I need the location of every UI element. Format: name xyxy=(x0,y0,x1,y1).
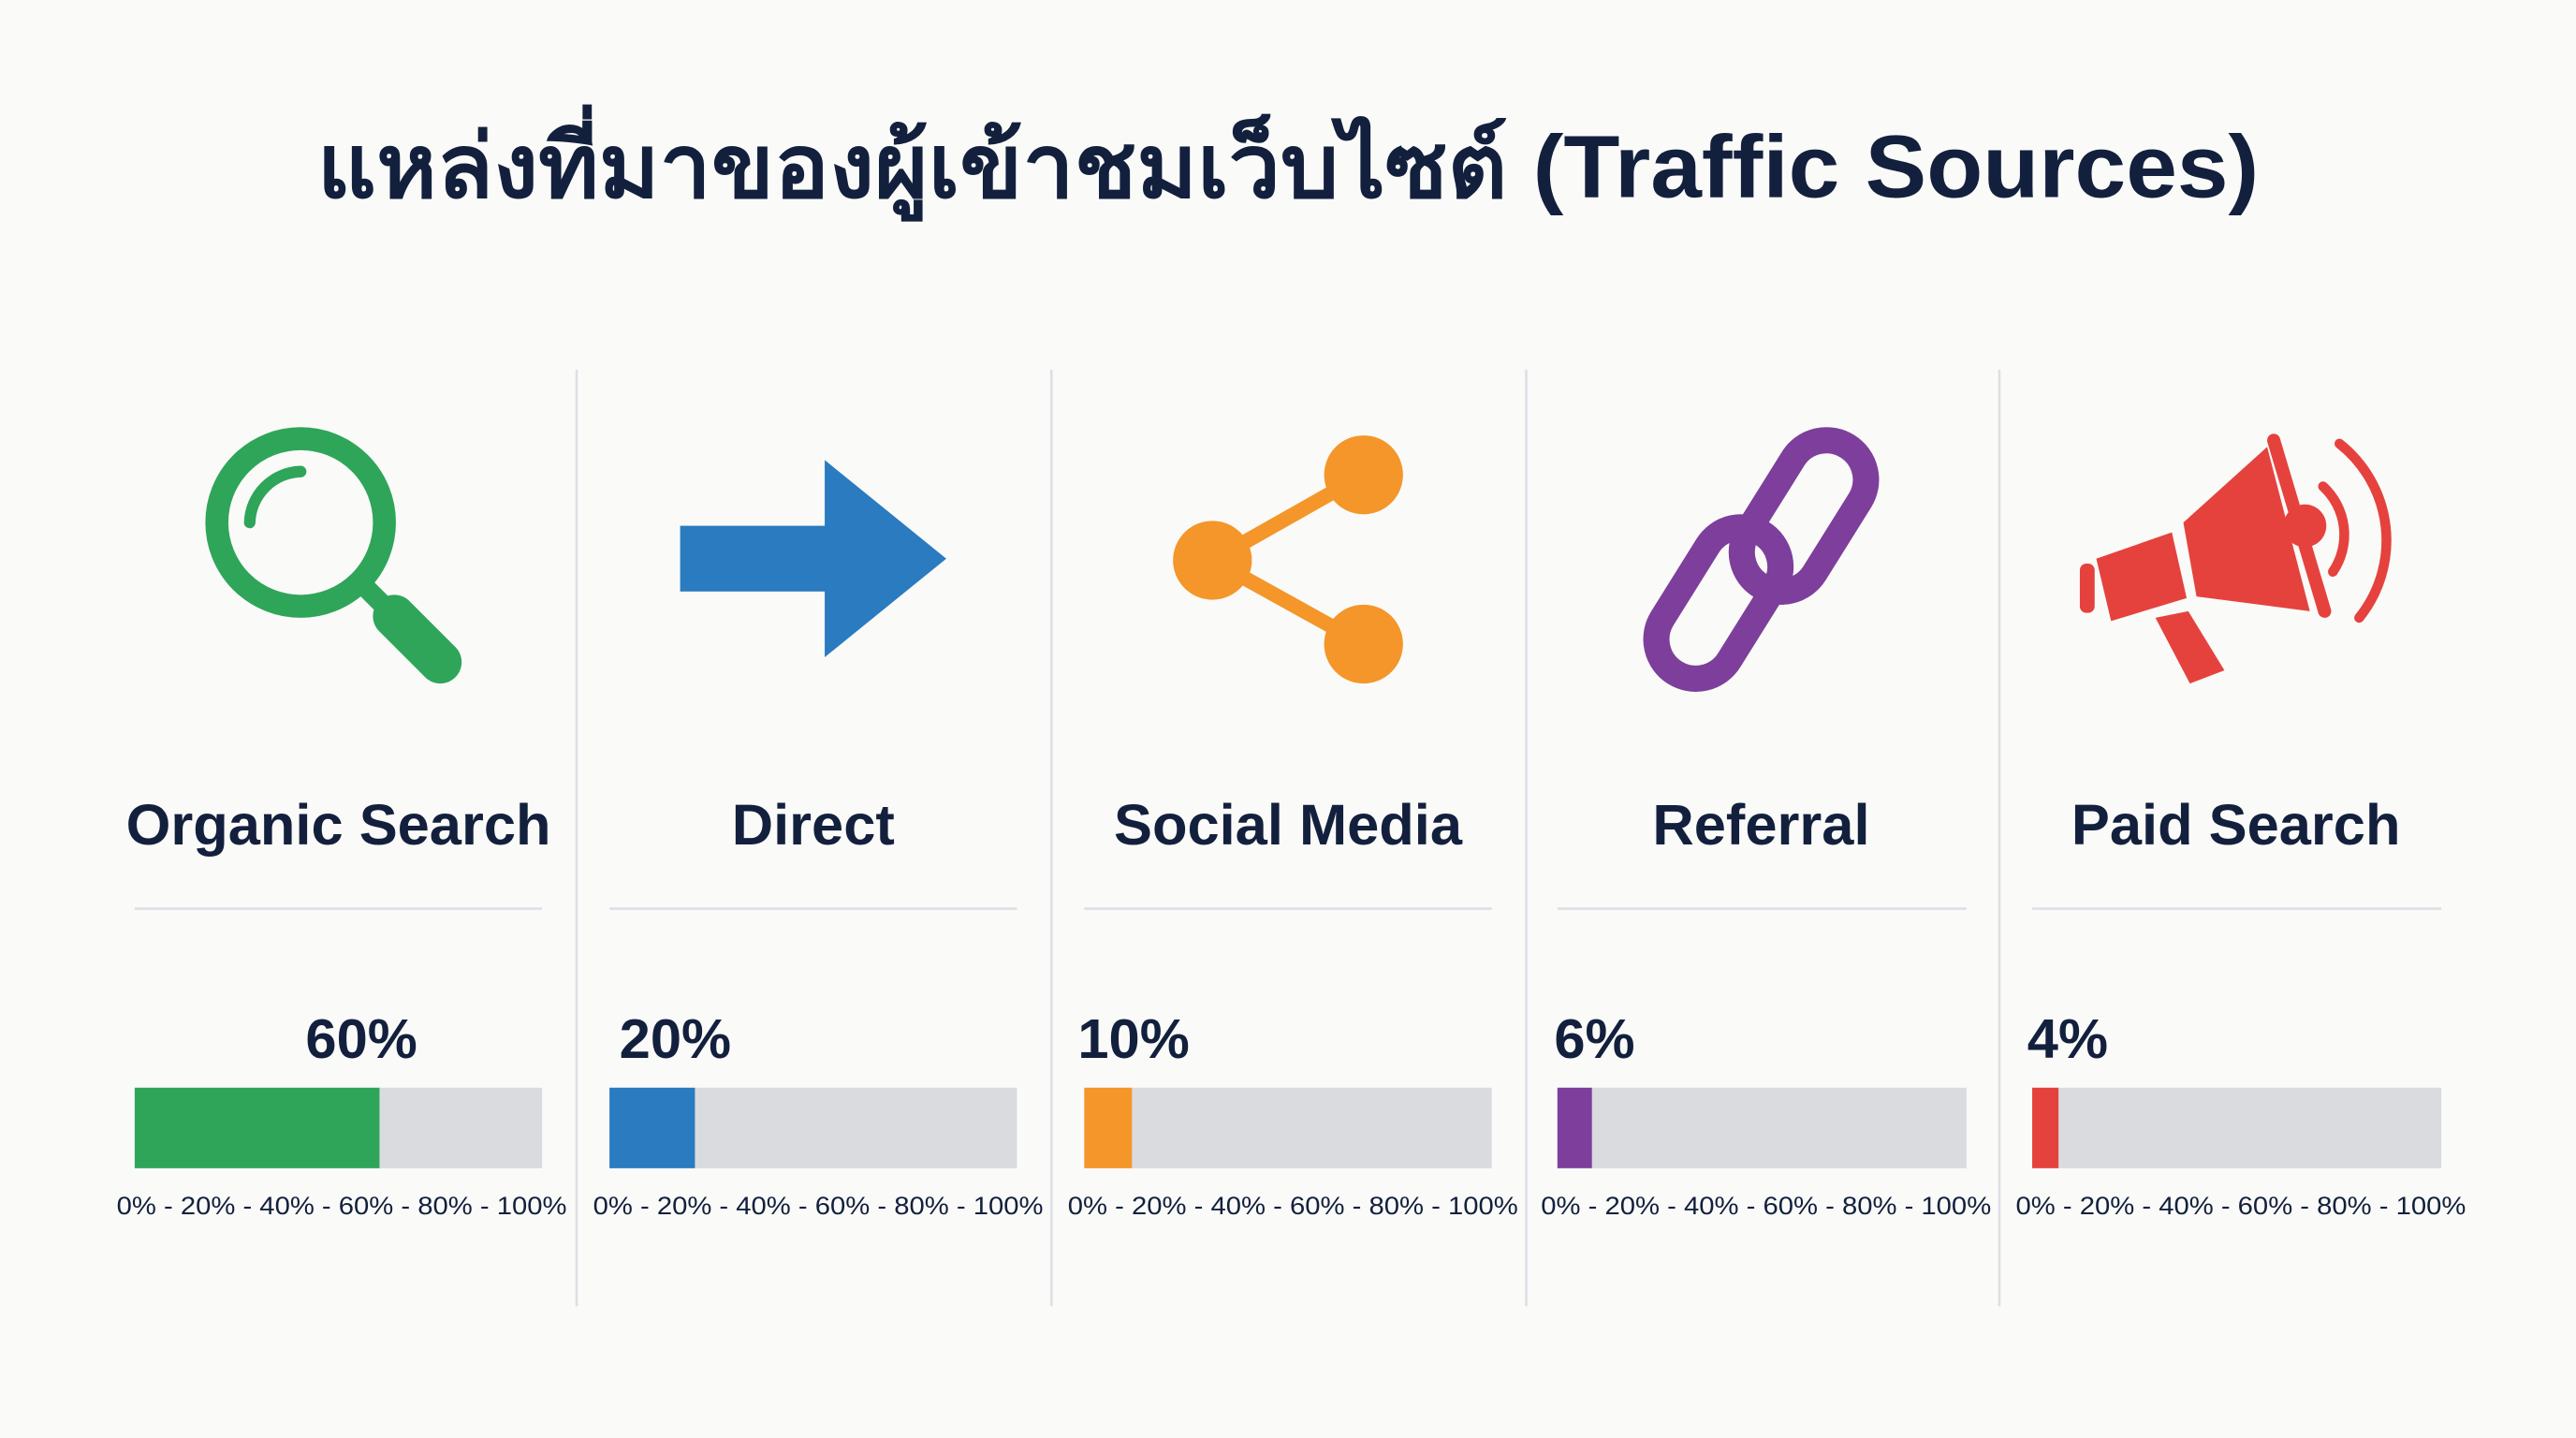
panel: referral xyxy=(1541,425,1991,1220)
axis labels: 0% - 20% - 40% - 60% - 80% - 100% xyxy=(593,1191,1043,1220)
title: แหล่งที่มาของผู้เข้าชมเว็บไซต์ (Traffic Sources) xyxy=(317,105,2259,223)
panel: social media xyxy=(1068,435,1518,1220)
percent: 10%: 10% xyxy=(1077,1007,1190,1070)
label: referral: Referral xyxy=(1652,793,1870,858)
percent: 20%: 20% xyxy=(620,1007,731,1070)
label: social media: Social Media xyxy=(1114,793,1463,858)
percent: 4%: 4% xyxy=(2027,1007,2108,1070)
panel: direct xyxy=(593,460,1043,1220)
panel: organic search xyxy=(117,439,567,1220)
icon: arrow xyxy=(681,460,946,657)
bar: 10% xyxy=(1084,1088,1492,1168)
label: paid search: Paid Search xyxy=(2071,793,2400,858)
panel: paid search xyxy=(2016,440,2466,1220)
percent: 60%: 60% xyxy=(305,1007,417,1070)
icon: megaphone xyxy=(2080,440,2386,683)
axis labels: 0% - 20% - 40% - 60% - 80% - 100% xyxy=(1541,1191,1991,1220)
icon: share xyxy=(1173,435,1403,683)
bar: 20% xyxy=(609,1088,1017,1168)
bar: 60% xyxy=(135,1088,542,1168)
label: direct: Direct xyxy=(732,793,895,858)
axis labels: 0% - 20% - 40% - 60% - 80% - 100% xyxy=(117,1191,567,1220)
bar: 6% xyxy=(1558,1088,1967,1168)
percent: 6%: 6% xyxy=(1554,1007,1635,1070)
axis labels: 0% - 20% - 40% - 60% - 80% - 100% xyxy=(2016,1191,2466,1220)
axis labels: 0% - 20% - 40% - 60% - 80% - 100% xyxy=(1068,1191,1518,1220)
bar: 4% xyxy=(2032,1088,2441,1168)
icon: magnifier xyxy=(217,439,440,662)
label: organic search: Organic Search xyxy=(126,793,551,858)
icon: chain link xyxy=(1642,425,1881,694)
